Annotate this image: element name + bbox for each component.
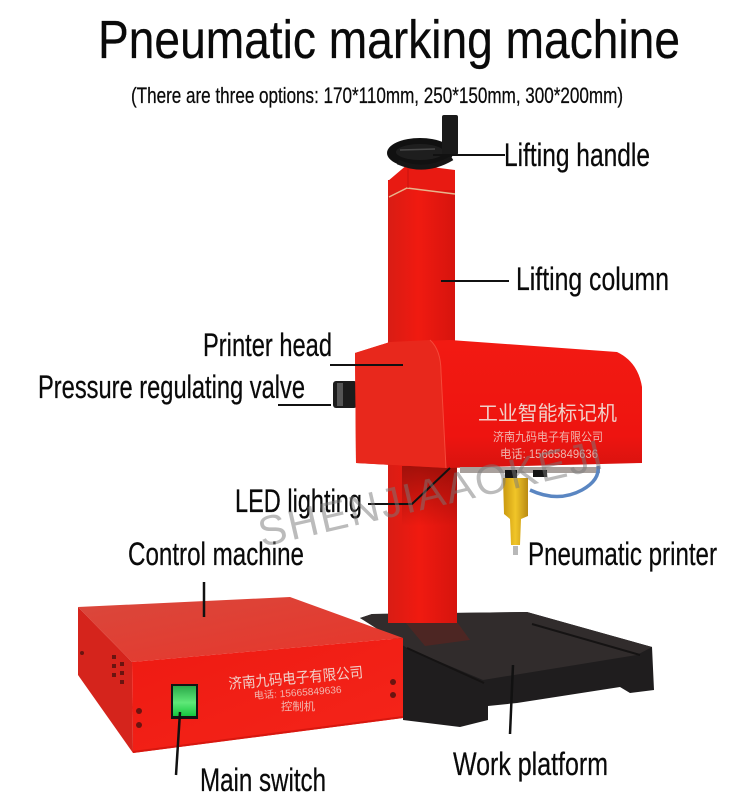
printer head housing (355, 340, 642, 468)
callout label: pressure regulating valve: Pressure regulating valve (38, 369, 305, 405)
box label text (228, 664, 364, 713)
box label text: 电话: 15665849636 (253, 683, 342, 702)
callout label: lifting handle: Lifting handle (504, 137, 650, 173)
callout label: control machine: Control machine (128, 536, 304, 572)
head label text: 济南九码电子有限公司 (493, 429, 603, 444)
pneumatic printer needle and hose (460, 466, 600, 555)
head label text: 电话: 15665849636 (500, 447, 598, 461)
callout label: main switch: Main switch (200, 762, 326, 798)
callout label: lifting column: Lifting column (516, 261, 669, 297)
control machine box (78, 597, 403, 753)
subtitle: size options: (There are three options: 170*110mm, 250*150mm, 300*200mm) (131, 83, 623, 108)
watermark: SHENJIAAOKEJI (253, 431, 607, 556)
box label text: 济南九码电子有限公司 (228, 664, 364, 693)
icon: lifting handle wheel (387, 115, 458, 168)
icon: pressure regulating valve knob (333, 381, 357, 408)
head label text (478, 402, 617, 461)
work platform base (360, 612, 654, 727)
box vent holes (80, 651, 396, 728)
callout: leader lines (176, 155, 513, 775)
callout label: printer head: Printer head (203, 327, 332, 363)
lifting column (388, 164, 457, 623)
head label text: 工业智能标记机 (478, 402, 617, 425)
callout label: LED lighting: LED lighting (235, 483, 362, 519)
icon: main switch (171, 684, 198, 719)
box label text: 控制机 (281, 699, 315, 713)
machine: marking unit (333, 115, 654, 727)
callout label: work platform: Work platform (453, 746, 608, 782)
